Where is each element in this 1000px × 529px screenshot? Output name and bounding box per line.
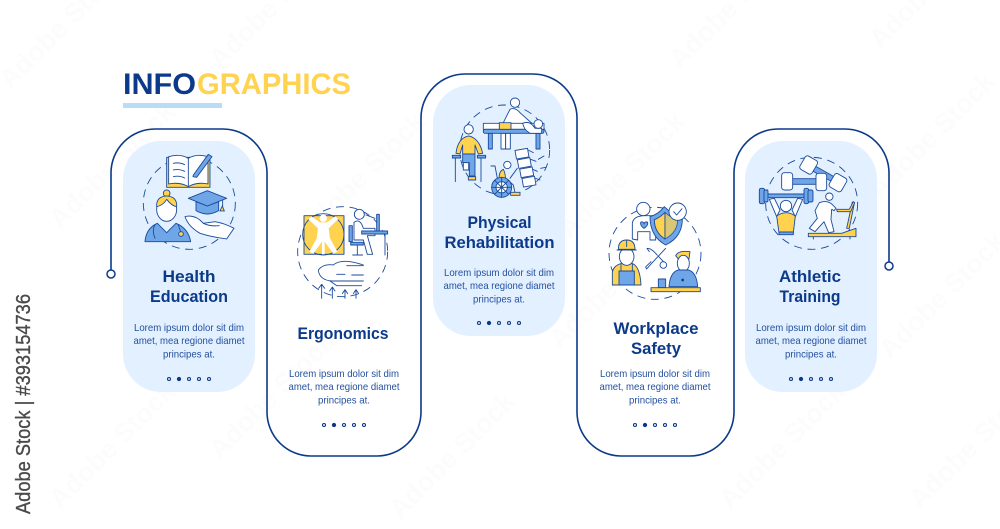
body text: amet, mea regione diamet	[756, 336, 867, 347]
body text	[444, 268, 555, 306]
body text: Lorem ipsum dolor sit dim	[289, 369, 399, 380]
heading: Education	[150, 287, 228, 306]
heading: Health	[162, 267, 216, 286]
body text: principes at.	[163, 350, 215, 360]
body text: principes at.	[473, 294, 525, 306]
pagination dots	[168, 377, 210, 381]
icon: nurse, book, cap and hand	[143, 154, 235, 249]
icon: shield, worker, tools and laptop user	[609, 202, 701, 299]
heading: Workplace	[614, 319, 698, 338]
body text: Lorem ipsum dolor sit dim	[444, 268, 554, 279]
pagination dots	[322, 423, 366, 427]
body text: principes at.	[629, 396, 681, 406]
heading: Athletic	[779, 267, 841, 286]
heading: Safety	[631, 339, 682, 358]
panel: health education	[123, 141, 255, 392]
pagination dots	[634, 423, 676, 427]
body text: amet, mea regione diamet	[600, 382, 711, 393]
body text: amet, mea regione diamet	[288, 382, 400, 393]
body text	[756, 323, 867, 360]
icon: therapy table, crutches, wheelchair and spine	[452, 98, 550, 197]
title: GRAPHICS	[197, 68, 351, 101]
panel background	[745, 141, 877, 392]
title	[123, 68, 351, 108]
body text	[134, 323, 245, 360]
icon: vitruvian man, desk worker and hand	[298, 207, 388, 298]
panel background	[433, 85, 565, 336]
heading	[444, 213, 554, 252]
body text: amet, mea regione diamet	[134, 336, 245, 347]
icon: dumbbells, weightlifter and treadmill runner	[759, 155, 858, 249]
heading: Ergonomics	[298, 324, 388, 343]
body text: Lorem ipsum dolor sit dim	[756, 323, 866, 334]
title: INFO	[123, 68, 196, 101]
heading	[150, 267, 228, 306]
panel background	[123, 141, 255, 392]
body text: Lorem ipsum dolor sit dim	[600, 369, 710, 380]
pagination dots	[790, 377, 832, 381]
panel: ergonomics	[288, 207, 400, 427]
heading	[614, 319, 698, 358]
heading: Physical	[468, 213, 532, 232]
connector outline	[107, 74, 893, 456]
body text: principes at.	[318, 396, 370, 406]
body text: principes at.	[785, 350, 837, 360]
panel: physical rehabilitation	[433, 85, 565, 336]
heading	[779, 267, 841, 306]
stock id side label: Adobe Stock | #393154736	[13, 294, 35, 514]
body text: amet, mea regione diamet	[444, 281, 555, 292]
body text	[600, 369, 711, 406]
heading: Rehabilitation	[444, 233, 554, 252]
panel: workplace safety	[600, 202, 711, 427]
panel: athletic training	[745, 141, 877, 392]
pagination dots	[478, 321, 520, 325]
body text: Lorem ipsum dolor sit dim	[134, 323, 244, 334]
body text	[288, 369, 400, 406]
heading: Training	[780, 287, 840, 306]
